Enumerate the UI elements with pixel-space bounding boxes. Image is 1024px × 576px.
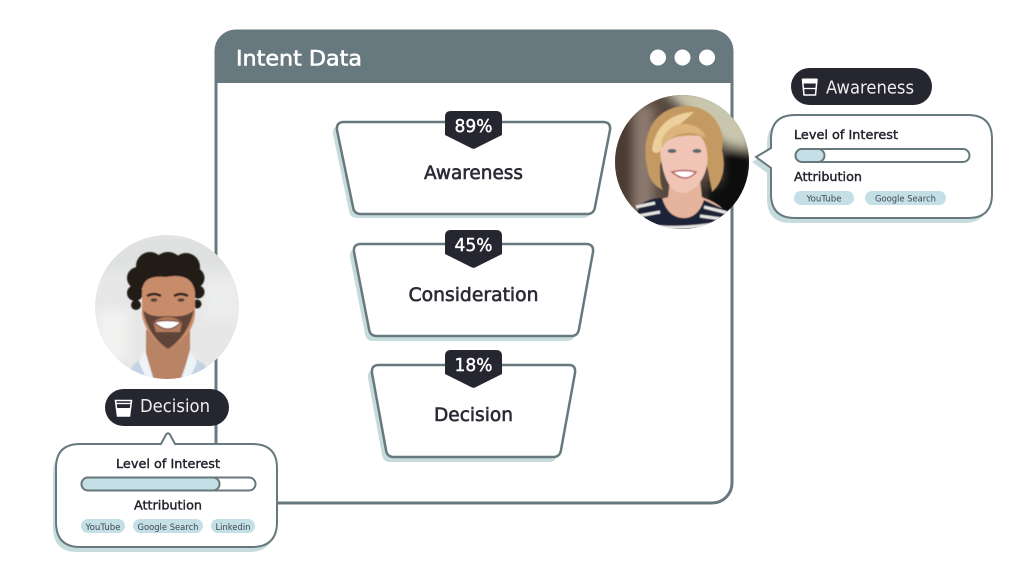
interest bar [82,478,256,490]
face [660,136,708,193]
collar shadow [139,350,153,378]
funnel stage: Decision [368,350,575,462]
Awareness pill tag: Awareness [826,78,914,98]
percentage badge 45%: 45% [454,235,492,256]
percentage badge 89% [445,111,502,149]
smile [672,170,696,178]
hair [645,106,724,192]
tag: Linkedin: Linkedin [216,523,250,533]
stage label: Consideration [408,284,538,306]
window header bar [215,30,733,83]
striped top [637,198,728,229]
tag: YouTube [81,519,125,533]
window control dots [650,50,715,66]
funnel stage: Consideration [350,230,593,341]
stage label: Awareness [424,162,523,184]
percentage badge 89%: 89% [454,116,492,137]
tag: Google Search: Google Search [138,523,198,533]
portrait: blonde woman [615,95,749,229]
tag: Google Search [133,519,203,533]
neck [146,330,190,380]
curly hair [127,252,204,310]
eyes [668,149,676,153]
browser window panel: Intent Data [215,30,733,503]
Decision pill tag [105,389,229,426]
percentage badge 18%: 18% [454,355,492,376]
percentage badge 18% [445,350,502,388]
attribution label: Attribution [794,169,862,184]
tag: Google Search [865,191,946,205]
tag: YouTube: YouTube [806,194,842,204]
portrait: curly-haired man [95,235,239,382]
Awareness pill tag [791,68,932,105]
attribution label: Attribution [134,498,202,512]
smile [154,320,181,329]
icon: glass [116,400,132,416]
level of interest label: Level of Interest [116,456,220,471]
interest bar [796,149,970,162]
icon: glass [802,78,817,95]
tag: Google Search: Google Search [875,194,936,204]
face [142,276,195,348]
funnel stage: Awareness [333,111,610,218]
tag: YouTube: YouTube [85,523,121,533]
stage label: Decision [434,404,513,426]
neck and chest [661,182,723,219]
beard [143,310,194,349]
tag: Linkedin [211,519,255,533]
percentage badge 45% [445,230,502,268]
level of interest label: Level of Interest [794,127,898,142]
shoulders and shirt [131,360,206,378]
tag: YouTube [794,191,854,205]
callout: Awareness details [752,115,992,223]
callout: Decision details [53,433,277,552]
brows and eyes [147,294,188,296]
Decision pill tag: Decision [140,397,210,417]
window title: Intent Data [236,46,362,70]
